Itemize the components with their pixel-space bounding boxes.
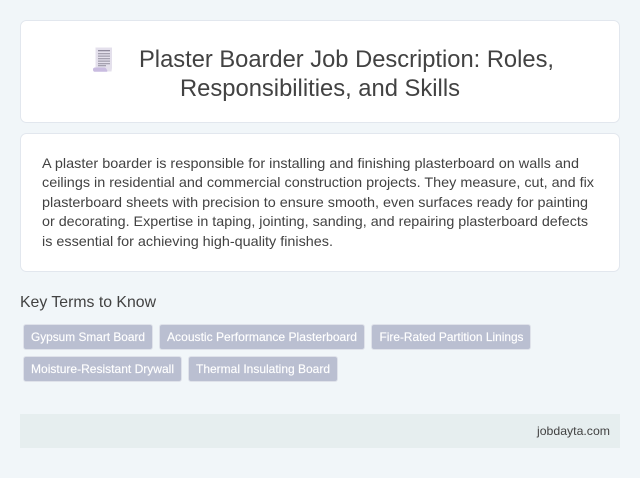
- text block: description: is essential for achieving high-quality finishes.: [42, 233, 333, 249]
- tag: acoustic performance plasterboard: [160, 324, 364, 350]
- tag: acoustic performance plasterboard: Acoustic Performance Plasterboard: [167, 330, 357, 344]
- title: Responsibilities, and Skills: [180, 75, 460, 102]
- text block: description: [42, 155, 594, 249]
- panel: title card: [20, 20, 620, 122]
- icon: document scroll: [93, 48, 112, 72]
- title: Plaster Boarder Job Description: Roles,: [139, 46, 554, 73]
- tag: thermal insulating board: Thermal Insulating Board: [196, 362, 330, 376]
- heading: key terms: Key Terms to Know: [20, 294, 156, 311]
- tag list: [24, 324, 530, 382]
- tag: thermal insulating board: [188, 356, 338, 382]
- footer text: jobdayta.com: [536, 424, 610, 438]
- tag: moisture-resistant drywall: [24, 356, 182, 382]
- text block: description: A plaster boarder is responsible for installing and finishing plasterboard on walls and: [42, 155, 579, 171]
- tag: fire-rated partition linings: [372, 324, 530, 350]
- panel: description card: [20, 134, 620, 272]
- tag: fire-rated partition linings: Fire-Rated Partition Linings: [380, 330, 524, 344]
- text block: description: ceilings in residential and commercial construction projects. They measure, cut, and fix: [42, 174, 594, 190]
- text block: description: plasterboard sheets with precision to ensure smooth, even surfaces ready for painting: [42, 194, 588, 210]
- footer bar: [20, 414, 620, 448]
- text block: description: or decorating. Expertise in taping, jointing, sanding, and repairing plasterboard defects: [42, 213, 588, 229]
- title: [139, 46, 554, 102]
- tag: moisture-resistant drywall: Moisture-Resistant Drywall: [31, 362, 174, 376]
- tag: gypsum smart board: [24, 324, 152, 350]
- tag: gypsum smart board: Gypsum Smart Board: [31, 330, 145, 344]
